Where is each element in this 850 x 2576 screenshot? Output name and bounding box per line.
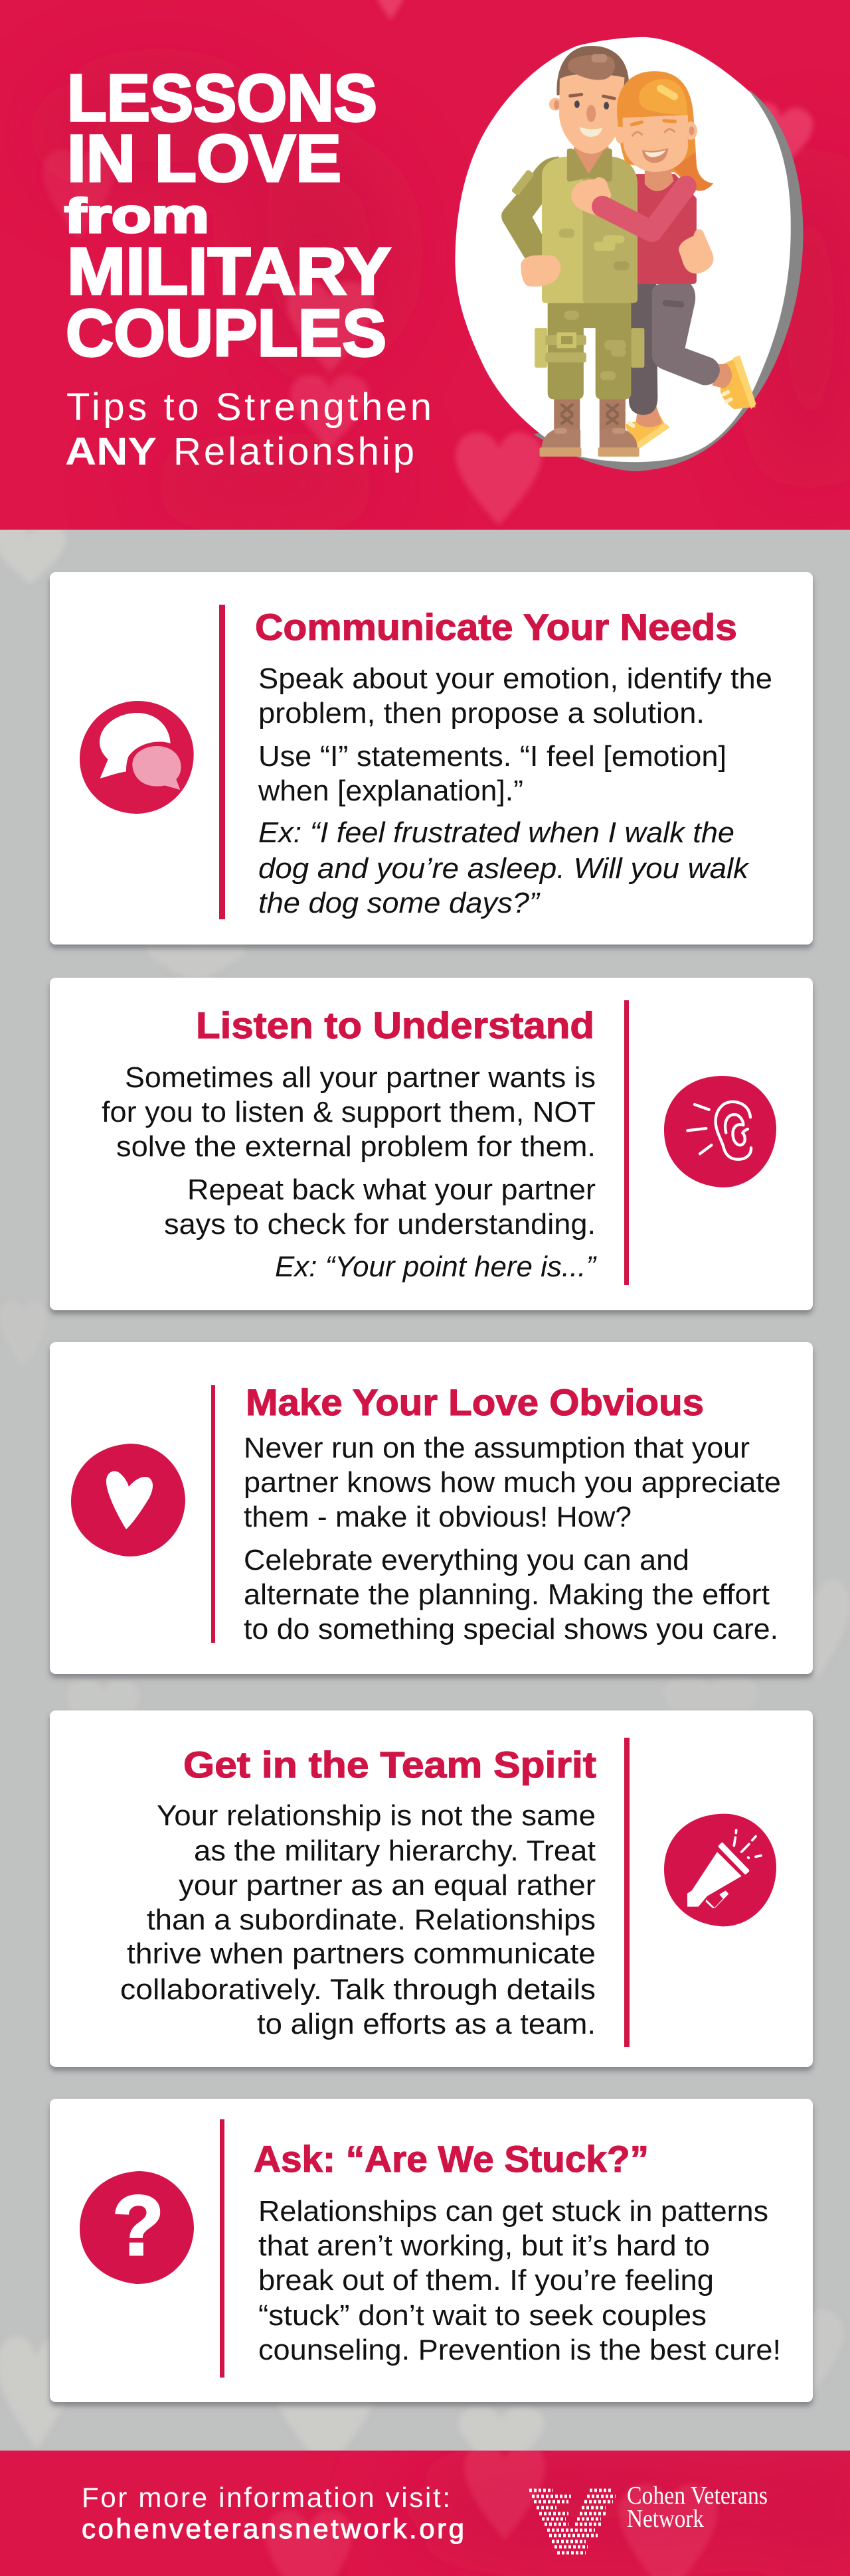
body text: Ex: “I feel frustrated when I walk the: [258, 816, 734, 849]
panel: communicate your needs: [50, 572, 813, 945]
illustration: military couple in white blob: [455, 37, 803, 471]
body text: [258, 2195, 781, 2366]
body text: that aren’t working, but it’s hard to: [258, 2230, 710, 2262]
divider bar: [211, 1385, 215, 1643]
body text: when [explanation].”: [258, 775, 523, 807]
body text: for you to listen & support them, NOT: [102, 1096, 596, 1128]
body text: says to check for understanding.: [164, 1208, 596, 1241]
grey blob shadow: [534, 90, 803, 471]
subtitle: Tips to Strengthen: [66, 386, 432, 429]
divider bar: [624, 1000, 629, 1285]
divider bar: [220, 2119, 224, 2378]
body text: your partner as an equal rather: [179, 1869, 596, 1902]
panel: ask are we stuck: [50, 2099, 813, 2402]
divider bar: [624, 1738, 630, 2047]
footer call to action: cohenveteransnetwork.org: [82, 2513, 464, 2544]
body text: “stuck” don’t wait to seek couples: [258, 2299, 707, 2332]
body text: as the military hierarchy. Treat: [194, 1835, 596, 1867]
body text: problem, then propose a solution.: [258, 697, 705, 729]
icon: question mark: [80, 2171, 194, 2284]
heading: Get in the Team Spirit: [183, 1744, 596, 1785]
white blob: [455, 37, 791, 462]
body text: them - make it obvious! How?: [244, 1501, 632, 1533]
woman head and arms: [571, 71, 713, 273]
grey background with faint hearts: [0, 530, 543, 2451]
heading: Make Your Love Obvious: [246, 1381, 704, 1423]
title: COUPLES: [66, 296, 386, 370]
title: LESSONS: [67, 61, 377, 135]
icon: speech bubbles: [80, 701, 194, 814]
icon: question mark: ?: [112, 2178, 164, 2273]
body text: break out of them. If you’re feeling: [258, 2264, 714, 2297]
header banner background: [0, 0, 850, 530]
body text: Ex: “Your point here is...”: [275, 1250, 597, 1283]
logo wordmark: Network: [627, 2505, 704, 2533]
body text: Sometimes all your partner wants is: [125, 1061, 596, 1094]
body text: Repeat back what your partner: [187, 1174, 596, 1206]
body text: [244, 1432, 781, 1645]
heading: Ask: “Are We Stuck?”: [254, 2138, 649, 2180]
body text: Speak about your emotion, identify the: [258, 662, 772, 695]
divider bar: [219, 605, 225, 919]
body text: alternate the planning. Making the effort: [244, 1578, 770, 1611]
heading: Communicate Your Needs: [255, 606, 737, 648]
panel: make your love obvious: [50, 1342, 813, 1674]
body text: solve the external problem for them.: [116, 1130, 596, 1163]
subtitle: [65, 386, 432, 473]
logo wordmark: Cohen Veterans: [627, 2482, 768, 2510]
footer call to action: For more information visit:: [82, 2482, 450, 2513]
body text: Relationships can get stuck in patterns: [258, 2195, 768, 2228]
body text: Use “I” statements. “I feel [emotion]: [258, 740, 726, 773]
body text: [258, 662, 772, 919]
body text: Never run on the assumption that your: [244, 1432, 750, 1464]
body text: than a subordinate. Relationships: [147, 1904, 596, 1936]
logo wordmark: [627, 2482, 768, 2533]
panel: listen to understand: [50, 978, 813, 1310]
icon: megaphone: [664, 1814, 776, 1926]
panel: get in the team spirit: [50, 1710, 813, 2067]
footer call to action: [82, 2482, 464, 2544]
icon: heart: [71, 1444, 185, 1556]
woman body and legs: [626, 174, 756, 449]
subtitle: Relationship: [173, 430, 414, 473]
body text: collaboratively. Talk through details: [120, 1973, 596, 2006]
title: IN LOVE: [67, 121, 341, 196]
body text: the dog some days?”: [258, 887, 541, 919]
icon: dotted V: [529, 2490, 616, 2553]
title: from: [64, 190, 209, 243]
body text: Your relationship is not the same: [157, 1799, 596, 1832]
body text: thrive when partners communicate: [127, 1937, 596, 1970]
man: [501, 46, 644, 457]
body text: [120, 1799, 596, 2040]
body text: dog and you’re asleep. Will you walk: [258, 852, 750, 885]
icon: ear: [664, 1076, 776, 1187]
body text: partner knows how much you appreciate: [244, 1466, 781, 1499]
body text: [102, 1061, 597, 1283]
body text: to align efforts as a team.: [257, 2008, 596, 2040]
title: [64, 61, 391, 370]
body text: Celebrate everything you can and: [244, 1544, 689, 1576]
subtitle: ANY: [65, 430, 157, 473]
heading: Listen to Understand: [196, 1004, 594, 1046]
footer banner background: [0, 2443, 850, 2576]
body text: counseling. Prevention is the best cure!: [258, 2334, 781, 2366]
title: MILITARY: [67, 234, 391, 309]
logo: Cohen Veterans Network: [529, 2482, 768, 2553]
body text: to do something special shows you care.: [244, 1613, 778, 1645]
